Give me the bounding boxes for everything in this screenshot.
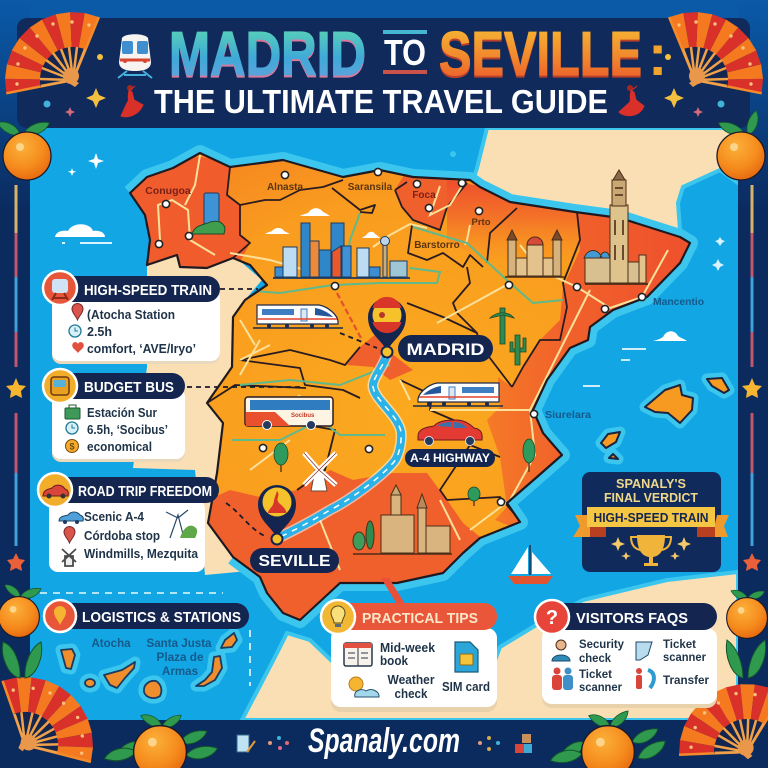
label: Alnasta: Alnasta (267, 182, 303, 193)
text: duration: 6.5h, ‘Socibus’ (87, 423, 168, 437)
icon: ticket scanner (636, 642, 652, 660)
green rivers (232, 213, 563, 440)
text: Cordoba: Córdoba stop (84, 529, 160, 543)
icon: fan top left (5, 12, 99, 93)
label: Seville (250, 548, 339, 573)
text: scanner: scanner (579, 680, 622, 694)
Canary island halos (61, 633, 237, 698)
dashed connectors (187, 289, 377, 537)
icon: light bulb badge (321, 600, 355, 634)
icon: star left gold (6, 378, 26, 398)
icon: Conugoa tower with hill (192, 193, 225, 234)
icon: clock (66, 422, 78, 434)
icon: Seville castle (353, 485, 452, 554)
region: Galicia (132, 157, 249, 267)
Canary islands (61, 633, 237, 698)
icon: fan bottom right (678, 674, 768, 768)
icon: orange top left (0, 116, 51, 180)
route: Madrid to Seville (280, 353, 401, 537)
icon: SIM card (455, 642, 478, 672)
decorative pink sparkles (65, 107, 703, 117)
decorative dots footer right (478, 736, 500, 751)
icon: blocks footer (515, 734, 532, 753)
icon: coin (66, 440, 78, 452)
icon: city skyline (273, 223, 410, 278)
ribbon: high-speed train: HIGH-SPEED TRAIN (594, 511, 708, 525)
heading: colon: : (648, 23, 667, 88)
region: north-east and east coast (487, 205, 700, 530)
icon: security officer (552, 640, 570, 661)
heading: visitors FAQs: VISITORS FAQS (576, 610, 688, 627)
icon: trophy (631, 535, 671, 566)
label: Armas: Armas (162, 664, 198, 678)
Spain coastline halo (130, 153, 690, 620)
region: Andalusia (209, 470, 480, 619)
icon: fan bottom left (2, 668, 96, 768)
decorative sparkles (86, 54, 684, 108)
heading: practical tips (335, 603, 497, 630)
icon: blue car (59, 512, 83, 524)
cloud dashes (62, 242, 112, 244)
regions, roads and rivers (120, 150, 700, 640)
text: windmills: Windmills, Mezquita (84, 547, 199, 561)
icon: leaves left (2, 642, 42, 678)
icon: train (118, 34, 152, 78)
left strip ribbon (14, 185, 18, 546)
map sea (30, 128, 738, 720)
icon: star left red (7, 553, 25, 571)
heading: high-speed train (64, 276, 220, 302)
heading: logistics and stations (66, 603, 249, 629)
map of Spain (120, 128, 738, 720)
panel: high-speed train (43, 271, 220, 364)
icon: Socibus coach: Socibus (291, 413, 315, 419)
right strip ribbon (750, 185, 754, 546)
icon: orange top right (717, 110, 765, 180)
panel: practical tips (321, 578, 497, 712)
icon: two passengers (552, 668, 573, 690)
icon: heart (72, 342, 84, 353)
icon: leaves right (726, 640, 766, 678)
heading: logistics and stations: LOGISTICS & STATIONS (82, 609, 241, 626)
icon: Giralda tower (584, 170, 648, 284)
text: mid-week book: Mid-week (380, 641, 435, 655)
decorative sparkles (611, 537, 691, 560)
text: check: check (579, 651, 611, 665)
Balearic islands (601, 378, 729, 459)
icon: wind turbine and hill (166, 510, 197, 538)
icon: car badge (38, 473, 72, 507)
text: SIM card: SIM card (442, 680, 490, 694)
icon: luggage (65, 405, 80, 419)
ribbon: high-speed train (573, 507, 729, 537)
icon: high-speed train east (413, 383, 503, 406)
text: Spanaly's: SPANALY'S (616, 477, 686, 491)
icon: coin: $ (69, 442, 75, 452)
label: Siurelara: Siurelara (545, 410, 591, 421)
heading: budget bus (64, 373, 185, 399)
panel: road trip freedom (38, 473, 219, 572)
text: transfer: Transfer (663, 673, 709, 687)
icon: palm and cactus (490, 308, 526, 365)
text: weather: Weather (388, 673, 435, 687)
icon: orange mid right (727, 585, 767, 638)
icon: trees (274, 439, 535, 506)
icon: weather (349, 677, 379, 697)
icon: sparkle stars north sea (68, 153, 104, 176)
region: Madrid (347, 333, 413, 380)
icon: star right red (743, 553, 761, 571)
icon: dancer left (121, 85, 143, 117)
label: Prto: Prto (472, 217, 491, 228)
icon: cloud top left (55, 224, 105, 237)
footer band (0, 720, 768, 768)
decorative bar top (383, 30, 427, 34)
icon: high-speed train north (253, 305, 343, 328)
icon: sparkles east sea (712, 237, 725, 271)
heading: high-speed train: HIGH-SPEED TRAIN (84, 282, 212, 299)
red dashed road (337, 293, 362, 340)
icon: location (72, 304, 83, 320)
region: Basque (396, 176, 468, 229)
label: Barstorro: Barstorro (414, 240, 460, 251)
heading: subtitle: THE ULTIMATE TRAVEL GUIDE (154, 83, 608, 120)
icon: Socibus coach (245, 397, 333, 430)
land: France to the north-east (470, 128, 738, 246)
text: scanner: scanner (663, 650, 706, 664)
icon: question badge: ? (546, 607, 558, 629)
icon: small clouds over land (265, 208, 380, 238)
text: ticket: Ticket (663, 637, 696, 651)
label: Saransila: Saransila (348, 182, 393, 193)
text: station: Estación Sur (87, 406, 157, 420)
text: book: book (380, 654, 408, 668)
land: North Africa to the south (242, 572, 738, 720)
label: Conugoa: Conugoa (145, 185, 191, 197)
icon: windmill small (62, 549, 76, 566)
text: economical: economical (87, 440, 152, 454)
icon: bus badge (43, 369, 77, 403)
land: Portugal (133, 250, 262, 575)
icon: orange bottom right (550, 709, 668, 768)
icon: transfer passengers (636, 668, 654, 689)
footer brand: Spanaly.com (308, 722, 460, 760)
icon: clock (69, 325, 81, 337)
panel: visitors FAQs (535, 600, 717, 708)
icon: document footer (237, 735, 255, 752)
heading: practical tips: PRACTICAL TIPS (362, 610, 478, 627)
label: Mancentio: Mancentio (653, 297, 704, 308)
icon: Madrid cathedral (505, 230, 565, 277)
icon: location badge (44, 600, 76, 632)
decorative dots footer left (268, 736, 289, 750)
panel: logistics and stations (44, 600, 249, 698)
panel: budget bus (43, 369, 185, 462)
heading: budget bus: BUDGET BUS (84, 379, 174, 396)
icon: dancer right (619, 85, 644, 116)
heading: MADRID: MADRID (169, 20, 366, 89)
region borders (207, 167, 580, 517)
left navy strip (0, 0, 30, 768)
header banner (17, 18, 750, 128)
decorative dots (44, 100, 724, 108)
label: Seville: SEVILLE (258, 553, 331, 570)
text: scenic: Scenic A-4 (84, 510, 144, 524)
text: check: check (394, 687, 428, 701)
decorative bar bottom (383, 70, 427, 74)
icon: cloud on east sea (653, 331, 687, 341)
heading: road trip freedom: ROAD TRIP FREEDOM (78, 483, 212, 500)
icon: train badge (43, 271, 77, 305)
region: northern red belt (447, 180, 580, 248)
icon: sailboat (508, 545, 553, 584)
icon: orange bottom left (104, 709, 218, 768)
icon: calendar book (344, 643, 372, 666)
sea dashes (583, 349, 646, 386)
heading: TO: TO (384, 32, 426, 73)
text: station: (Atocha Station (87, 308, 175, 322)
text: final verdict: FINAL VERDICT (604, 491, 698, 505)
icon: windmill (304, 453, 336, 491)
heading: SEVILLE: SEVILLE (439, 20, 642, 89)
icon: fan top right (669, 12, 763, 93)
sea dot (450, 151, 456, 157)
label: Plaza de: Plaza de (156, 650, 204, 664)
icon: A-4 highway label: A-4 HIGHWAY (410, 453, 490, 465)
pin: Madrid (368, 297, 406, 358)
heading: road trip freedom (60, 477, 219, 503)
beige roads (158, 155, 668, 570)
right navy strip (738, 0, 768, 768)
top blue band (0, 0, 768, 128)
callout pointer (381, 578, 405, 604)
text: comfort: comfort, ‘AVE/Iryo’ (87, 342, 196, 356)
icon: star right gold (742, 378, 762, 398)
city markers (155, 168, 646, 506)
text: ticket: Ticket (579, 667, 612, 681)
white dashed sea lines (40, 593, 250, 686)
text: security: Security (579, 637, 624, 651)
Spain outline (130, 153, 690, 620)
pin: Seville (258, 485, 296, 544)
icon: question badge (535, 600, 569, 634)
text: duration: 2.5h (87, 325, 112, 339)
label: Atocha: Atocha (92, 636, 131, 650)
label: Foca: Foca (412, 190, 436, 201)
icon: A-4 highway label (405, 449, 495, 467)
panel: final verdict (573, 472, 729, 572)
Balearic island halos (601, 378, 729, 459)
label: Madrid (398, 335, 493, 362)
heading: visitors FAQs (552, 603, 717, 630)
label: Santa Justa: Santa Justa (146, 636, 212, 650)
icon: location (64, 526, 75, 543)
icon: orange mid left (0, 581, 41, 637)
label: Madrid: MADRID (406, 340, 484, 359)
Spain mainland (130, 153, 690, 620)
icon: red car (418, 420, 482, 446)
